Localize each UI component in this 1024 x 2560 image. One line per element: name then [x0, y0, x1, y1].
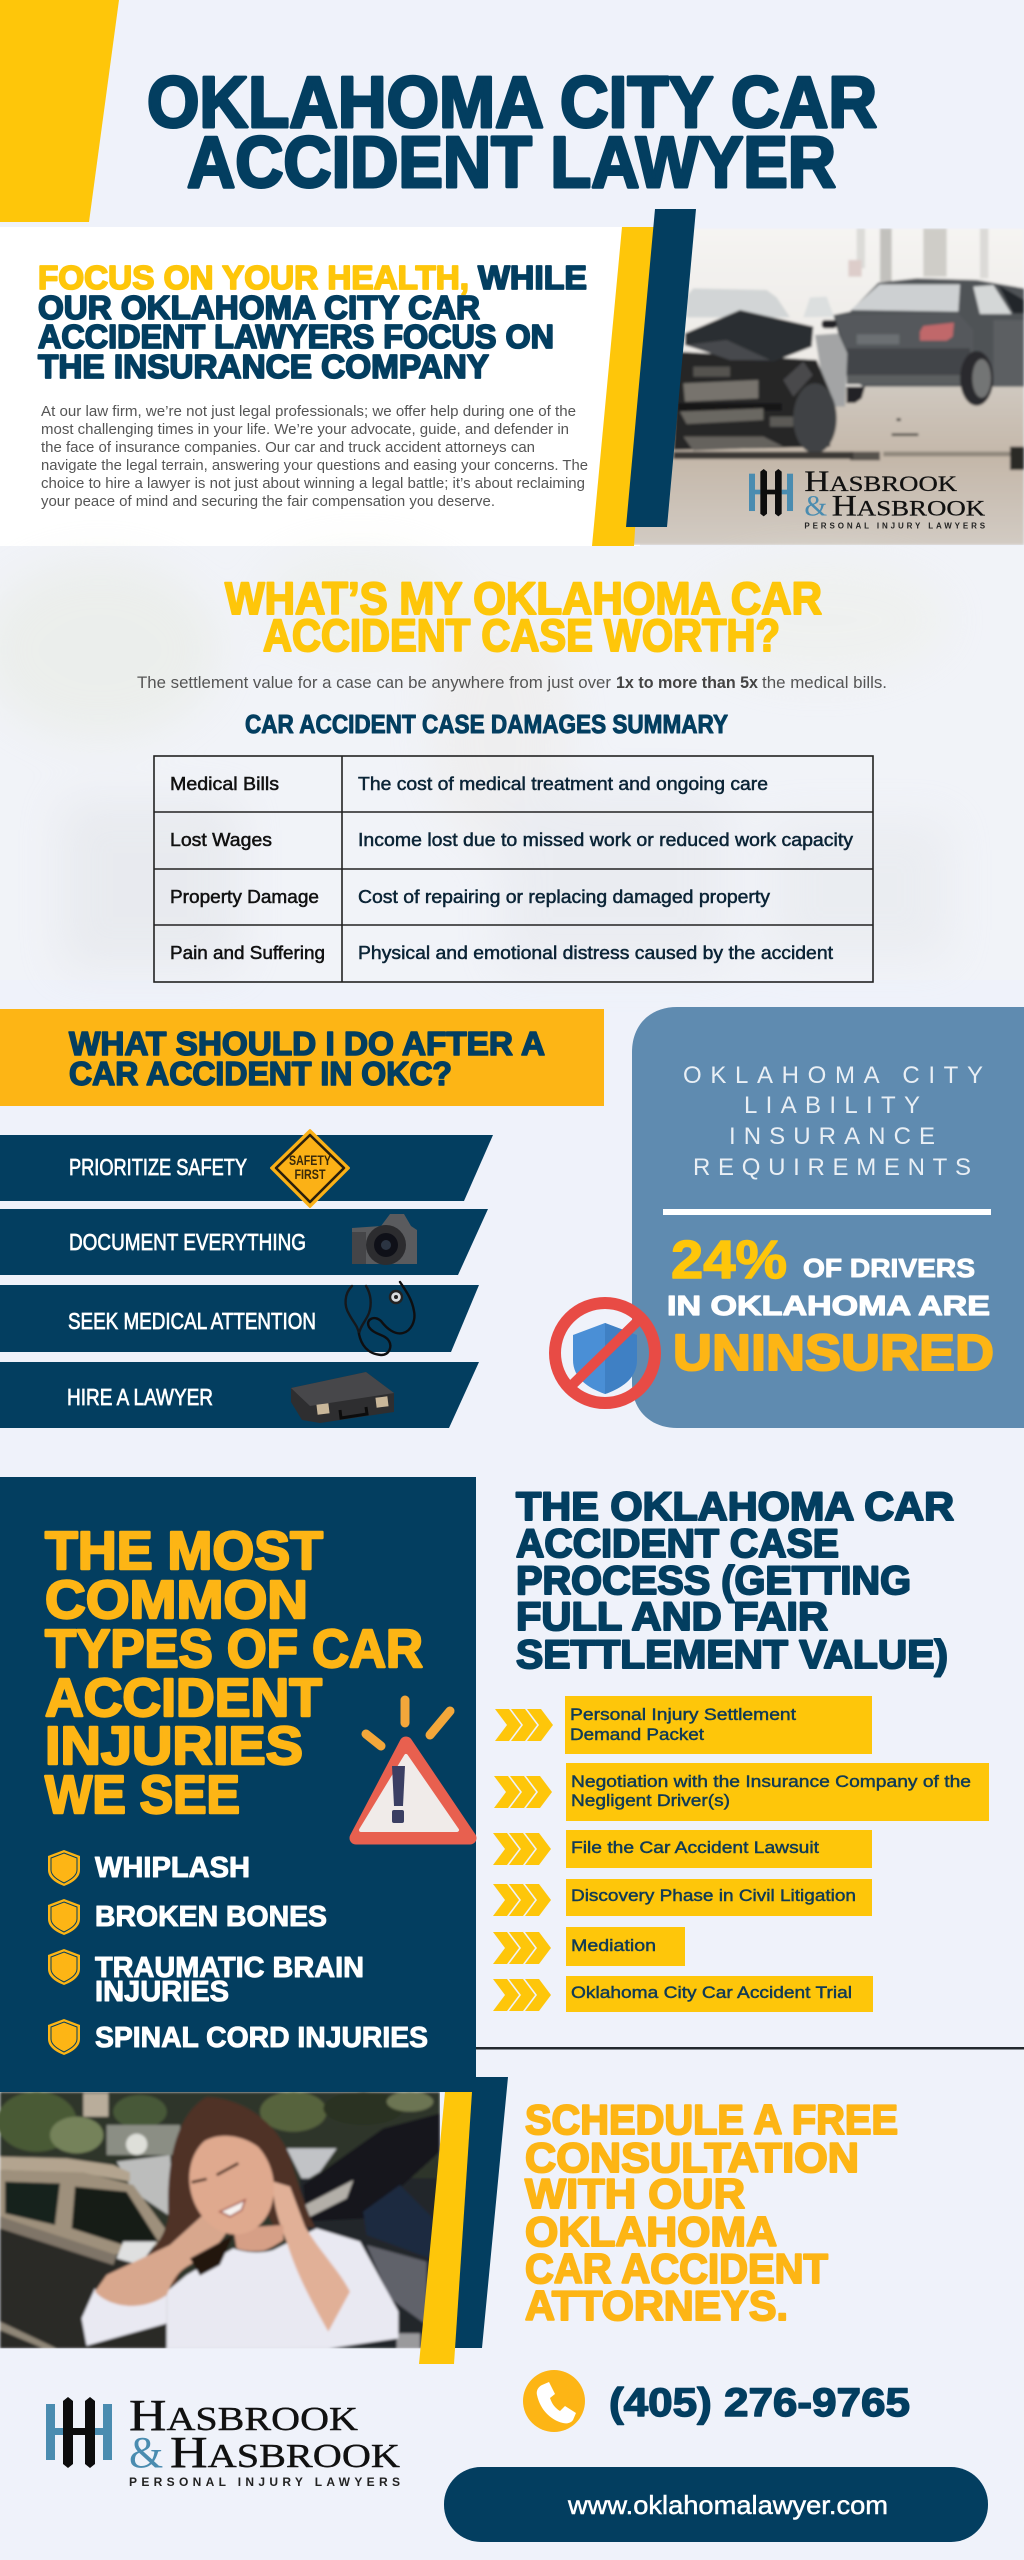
logo: Hasbrook and Hasbrook: PERSONAL INJURY LAWYERS	[129, 2475, 400, 2489]
heading: what should I do: WHAT SHOULD I DO AFTER A	[69, 1025, 545, 1062]
panel: case process	[493, 1485, 989, 2012]
heading: focus on your health: OUR OKLAHOMA CITY CAR	[38, 289, 480, 326]
step: prioritize safety: PRIORITIZE SAFETY	[69, 1154, 247, 1180]
logo on photo	[749, 466, 986, 530]
faint background photo	[0, 550, 950, 970]
logo on photo: HASBROOK	[804, 466, 958, 498]
damages table: Physical and emotional distress caused by the accident	[358, 943, 833, 963]
damages table: Medical Bills	[170, 774, 279, 794]
logo: Hasbrook and Hasbrook: HASBROOK	[170, 2428, 401, 2477]
heading: requirements: INSURANCE	[729, 1123, 935, 1150]
statistic: 24% uninsured	[667, 1230, 994, 1381]
list: traumatic brain injuries: INJURIES	[95, 1976, 229, 2008]
list: broken bones: BROKEN BONES	[95, 1901, 327, 1933]
contact: phone	[523, 2370, 910, 2432]
heading: focus on your health: THE INSURANCE COMPANY	[38, 348, 489, 385]
statistic: 24% uninsured: IN OKLAHOMA ARE	[667, 1290, 990, 1321]
heading: case worth: WHAT’S MY OKLAHOMA CAR	[225, 573, 822, 624]
step 3: file lawsuit: File the Car Accident Lawsuit	[571, 1838, 819, 1857]
heading: schedule consultation: SCHEDULE A FREE	[525, 2096, 898, 2143]
icon: warning triangle	[356, 1700, 470, 1838]
step 3: file lawsuit	[493, 1830, 872, 1868]
navy stripe	[448, 2077, 508, 2348]
settlement sentence: the medical bills.	[762, 673, 887, 692]
heading: schedule consultation: OKLAHOMA	[525, 2208, 777, 2255]
panel: liability insurance requirements	[555, 1007, 1024, 1428]
intro paragraph: At our law firm, we’re not just legal professionals; we offer help during one of the	[41, 403, 576, 420]
heading: schedule consultation	[525, 2096, 898, 2329]
heading: what should I do: CAR ACCIDENT IN OKC?	[69, 1055, 452, 1092]
panel: common injuries	[0, 1477, 476, 2092]
intro paragraph	[41, 403, 588, 510]
logo on photo: HASBROOK	[832, 491, 986, 523]
step 2: negotiation: Negotiation with the Insurance Company of the	[571, 1772, 971, 1791]
logo: Hasbrook and Hasbrook	[46, 2391, 401, 2489]
statistic: 24% uninsured: UNINSURED	[673, 1324, 994, 1381]
damages table	[154, 756, 873, 982]
logo: Hasbrook and Hasbrook: HASBROOK	[129, 2391, 359, 2440]
icon: safety first sign: FIRST	[294, 1166, 326, 1182]
logo on photo: &	[804, 491, 827, 523]
heading: focus on your health	[38, 259, 587, 385]
icon: camera	[352, 1214, 417, 1265]
step: document everything	[0, 1209, 488, 1275]
panel: consultation photo	[0, 2077, 508, 2364]
heading: most common injuries: ACCIDENT	[45, 1668, 322, 1728]
intro paragraph: the face of insurance companies. Our car and truck accident attorneys can	[41, 439, 535, 456]
heading: most common injuries: THE MOST	[45, 1521, 323, 1581]
heading: schedule consultation: CAR ACCIDENT	[525, 2245, 828, 2292]
heading: case process: SETTLEMENT VALUE)	[516, 1633, 948, 1677]
intro paragraph: your peace of mind and securing the fair compensation you deserve.	[41, 493, 495, 510]
step 2: negotiation	[494, 1763, 989, 1821]
intro paragraph: navigate the legal terrain, answering your questions and easing your concerns. The	[41, 457, 588, 474]
title: ACCIDENT LAWYER	[187, 123, 836, 203]
list: spinal cord injuries: SPINAL CORD INJURIES	[95, 2022, 428, 2054]
step 1: demand packet: Personal Injury Settlement	[570, 1705, 796, 1724]
heading: case process: ACCIDENT CASE	[516, 1522, 839, 1566]
panel: intro	[0, 209, 1024, 546]
panel: what to do after an accident	[0, 1009, 604, 1428]
photo: crashed cars	[630, 228, 1024, 545]
heading: focus on your health: FOCUS ON YOUR HEALTH,	[38, 259, 469, 296]
logo on photo: PERSONAL INJURY LAWYERS	[804, 521, 986, 530]
heading: focus on your health: WHILE	[478, 259, 587, 296]
step: seek medical attention: SEEK MEDICAL ATTENTION	[68, 1308, 316, 1334]
heading: case worth	[225, 573, 822, 661]
damages table: Property Damage	[170, 887, 319, 907]
heading: schedule consultation: WITH OUR	[525, 2170, 745, 2217]
corner accent: yellow parallelogram	[0, 0, 119, 222]
list: whiplash	[48, 1850, 250, 1886]
step: hire a lawyer	[0, 1362, 479, 1428]
step 1: demand packet: Demand Packet	[570, 1725, 704, 1744]
icon: no insurance shield	[555, 1303, 655, 1403]
damages table: Cost of repairing or replacing damaged property	[358, 887, 770, 907]
step: document everything: DOCUMENT EVERYTHING	[69, 1229, 306, 1255]
step: seek medical attention	[0, 1282, 479, 1355]
step 2: negotiation: Negligent Driver(s)	[571, 1791, 730, 1810]
settlement sentence: The settlement value for a case can be anywhere from just over	[137, 673, 611, 692]
website button	[444, 2467, 988, 2542]
settlement sentence	[137, 673, 887, 692]
logo: Hasbrook and Hasbrook: &	[129, 2428, 163, 2477]
step 5: mediation: Mediation	[571, 1936, 656, 1955]
heading: case process	[516, 1485, 954, 1677]
icon: stethoscope	[346, 1282, 414, 1355]
heading: schedule consultation: CONSULTATION	[525, 2134, 859, 2181]
damages table: Lost Wages	[170, 830, 272, 850]
heading: case process: PROCESS (GETTING	[516, 1559, 911, 1603]
step 4: discovery: Discovery Phase in Civil Litigation	[571, 1886, 856, 1905]
step: hire a lawyer: HIRE A LAWYER	[67, 1384, 213, 1410]
heading: most common injuries: COMMON	[45, 1570, 308, 1630]
heading: what should I do	[69, 1025, 545, 1092]
table title: CAR ACCIDENT CASE DAMAGES SUMMARY	[245, 709, 728, 739]
yellow stripe	[592, 227, 654, 546]
step 6: trial: Oklahoma City Car Accident Trial	[571, 1983, 852, 2002]
heading: most common injuries	[45, 1521, 423, 1825]
title: OKLAHOMA CITY CAR	[147, 63, 877, 143]
list: traumatic brain injuries	[48, 1949, 364, 2008]
panel: case worth	[0, 546, 1024, 982]
heading: requirements	[683, 1062, 983, 1181]
navy stripe	[626, 209, 696, 527]
intro paragraph: choice to hire a lawyer is not just about winning a legal battle; it’s about reclaiming	[41, 475, 585, 492]
settlement sentence: 1x to more than 5x	[616, 673, 759, 692]
heading: case process: THE OKLAHOMA CAR	[516, 1485, 954, 1529]
icon: safety first sign	[271, 1130, 349, 1207]
heading: requirements: REQUIREMENTS	[693, 1154, 971, 1181]
contact: phone: (405) 276-9765	[609, 2381, 910, 2425]
damages table: The cost of medical treatment and ongoing care	[358, 774, 768, 794]
heading: focus on your health: ACCIDENT LAWYERS FOCUS ON	[38, 318, 554, 355]
list: traumatic brain injuries: TRAUMATIC BRAIN	[95, 1952, 364, 1984]
heading: case worth: ACCIDENT CASE WORTH?	[263, 610, 780, 661]
heading: most common injuries: INJURIES	[45, 1716, 303, 1776]
damages table: Income lost due to missed work or reduced work capacity	[358, 830, 853, 850]
step 5: mediation	[493, 1927, 685, 1966]
step 1: demand packet	[495, 1696, 872, 1754]
list: whiplash: WHIPLASH	[95, 1852, 250, 1884]
icon: briefcase	[291, 1372, 394, 1423]
statistic: 24% uninsured: 24%	[671, 1230, 787, 1290]
damages table: Pain and Suffering	[170, 943, 325, 963]
step: prioritize safety	[0, 1130, 493, 1207]
heading: requirements: LIABILITY	[744, 1092, 920, 1119]
heading: schedule consultation: ATTORNEYS.	[525, 2282, 788, 2329]
step 6: trial	[493, 1976, 873, 2012]
heading: requirements: OKLAHOMA CITY	[683, 1062, 983, 1089]
icon: safety first sign: SAFETY	[289, 1152, 331, 1168]
title	[147, 63, 877, 203]
heading: most common injuries: WE SEE	[45, 1765, 240, 1825]
intro paragraph: most challenging times in your life. We’re your advocate, guide, and defender in	[41, 421, 569, 438]
heading: most common injuries: TYPES OF CAR	[45, 1619, 423, 1679]
statistic: 24% uninsured: OF DRIVERS	[803, 1253, 975, 1283]
step 4: discovery	[493, 1879, 872, 1916]
photo: woman with neck pain	[0, 2092, 440, 2348]
yellow stripe	[419, 2092, 472, 2364]
heading: case process: FULL AND FAIR	[516, 1595, 828, 1639]
website button: www.oklahomalawyer.com	[567, 2490, 888, 2520]
